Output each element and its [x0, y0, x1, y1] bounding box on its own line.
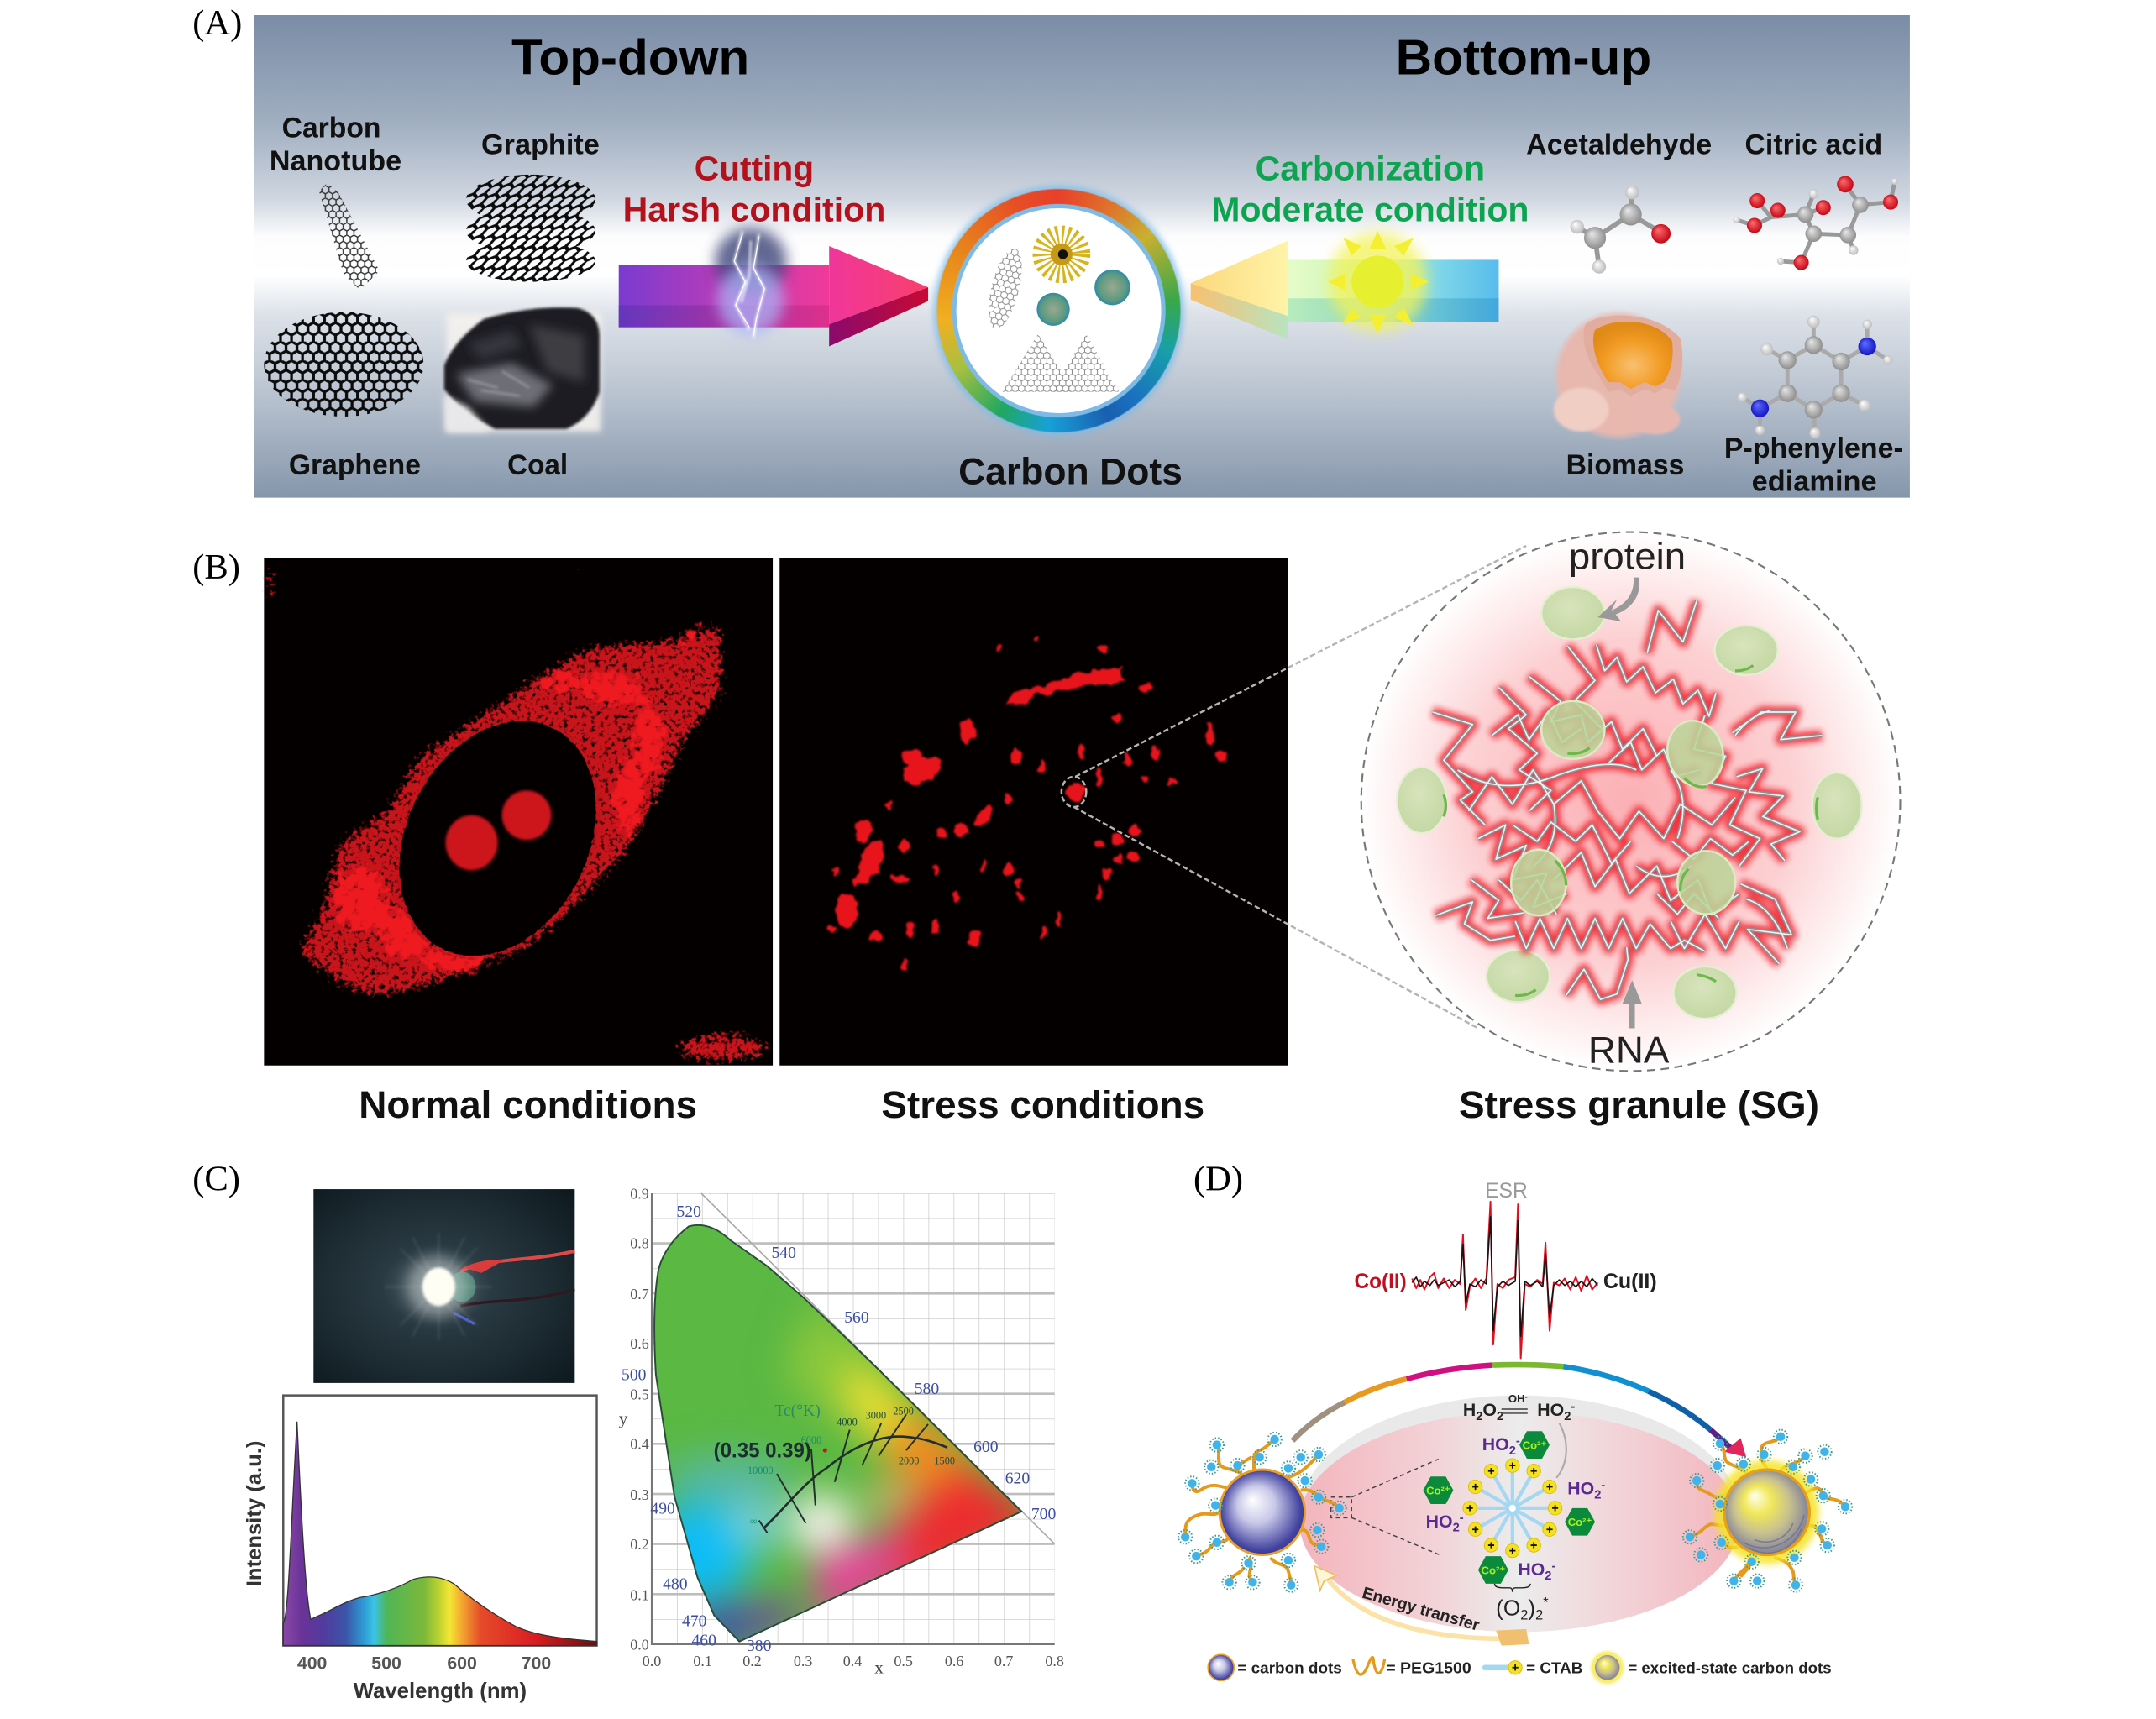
wavelength labels: 580	[915, 1380, 939, 1398]
label: (O2)2*: (O	[1496, 1596, 1520, 1621]
protein highlights	[1444, 665, 1818, 996]
label: Cu(II): Cu(II)	[1603, 1271, 1657, 1293]
label: protein: protein	[1569, 537, 1686, 578]
wavelength labels: 500	[622, 1366, 647, 1385]
label: (O2)2*: 2	[1520, 1607, 1528, 1622]
arrow: RNA	[1623, 980, 1642, 1029]
Co2+ hexagons: Co²⁺	[1482, 1564, 1505, 1576]
icon: carbon nanotube	[319, 183, 380, 290]
x axis ticks: 0.3	[794, 1653, 812, 1669]
wavelength labels: 600	[973, 1438, 999, 1456]
y axis ticks: 0.8	[630, 1234, 649, 1251]
reaction: H2O2 to HO2-: 2	[1476, 1410, 1482, 1423]
dashed zoom lines	[1331, 1459, 1440, 1555]
HO2- labels: 2	[1453, 1522, 1460, 1535]
label: Co(II): Co(II)	[1355, 1271, 1407, 1293]
axis names	[619, 1408, 884, 1677]
y axis ticks: 0.0	[630, 1636, 649, 1653]
colour temperature labels	[748, 1402, 955, 1528]
label: Graphite: Graphite	[481, 128, 600, 160]
y axis ticks: 0.2	[630, 1536, 649, 1553]
label: Carbon Nanotube: Carbon	[282, 113, 381, 144]
wavelength labels: 460	[691, 1632, 716, 1650]
Co2+ hexagons: Co²⁺	[1426, 1485, 1450, 1497]
y axis ticks: 0.9	[630, 1186, 649, 1203]
micrograph: normal conditions	[264, 558, 773, 1066]
x axis ticks: 0.8	[1045, 1653, 1064, 1669]
HO2- labels: -	[1551, 1560, 1555, 1574]
colour temperature labels: 10000	[748, 1465, 774, 1476]
rainbow arrow	[1293, 1365, 1746, 1457]
panel label D: (D)	[1193, 1160, 1243, 1199]
label: Carbonization Moderate condition: Carbonization	[1256, 149, 1485, 187]
axis names: x	[874, 1657, 884, 1677]
icon: graphene sheet	[264, 312, 423, 417]
x axis ticks: 0.1	[693, 1653, 712, 1669]
Co2+ hexagons: Co²⁺	[1523, 1439, 1546, 1451]
Planckian locus	[759, 1415, 947, 1533]
colour temperature labels: 2500	[893, 1406, 914, 1418]
label: Carbonization Moderate condition: Moderate condition	[1211, 191, 1529, 229]
reaction: H2O2 to HO2-	[1463, 1392, 1575, 1423]
wavelength labels: 700	[1031, 1505, 1056, 1523]
schematic: stress granule	[1361, 532, 1900, 1071]
panel label B: (B)	[192, 548, 240, 587]
legend: = excited-state carbon dots	[1628, 1659, 1832, 1676]
free proteins	[1397, 587, 1862, 1019]
HO2- labels: 2	[1509, 1444, 1516, 1458]
y axis ticks: 0.7	[630, 1286, 649, 1302]
wavelength labels: 520	[676, 1203, 701, 1221]
label: Cutting Harsh condition: Harsh condition	[623, 191, 885, 229]
label: Acetaldehyde: Acetaldehyde	[1526, 128, 1712, 160]
panel B: stress granule imaging	[264, 532, 1900, 1126]
label: P-phenylene-ediamine: ediamine	[1752, 465, 1877, 497]
label: Citric acid: Citric acid	[1744, 128, 1882, 160]
label: ESR: ESR	[1485, 1180, 1528, 1203]
axis names: y	[619, 1408, 628, 1428]
label: (O2)2*: *	[1543, 1596, 1549, 1611]
molecule: acetaldehyde	[1571, 186, 1671, 274]
label: Graphene: Graphene	[289, 449, 421, 481]
HO2- labels: 2	[1594, 1488, 1601, 1502]
red chromaticity point	[823, 1449, 827, 1453]
chart: ESR trace	[1412, 1202, 1597, 1358]
icon: biomass egg	[1552, 309, 1684, 442]
label: Coal: Coal	[507, 449, 568, 481]
HO2- labels: HO	[1567, 1479, 1594, 1499]
panel D: energy transfer mechanism	[1178, 1180, 1852, 1684]
label: Carbon Nanotube: Nanotube	[270, 145, 401, 177]
icon: graphite stacked sheets	[466, 175, 595, 282]
colour temperature labels: 6000	[801, 1434, 821, 1446]
carbon dots ring	[934, 186, 1184, 436]
x axis ticks: 0.4	[843, 1653, 862, 1669]
colour temperature labels: ∞	[750, 1516, 758, 1528]
wavelength labels: 620	[1005, 1469, 1030, 1487]
zoom callout lines	[1062, 546, 1526, 1029]
x axis tick labels	[297, 1653, 551, 1673]
chart: CIE chromaticity diagram	[619, 1186, 1064, 1677]
x axis ticks: 0.0	[643, 1653, 661, 1669]
y axis ticks: 0.1	[630, 1587, 649, 1604]
arrow: energy transfer	[1314, 1566, 1529, 1646]
x axis ticks: 0.6	[945, 1653, 963, 1669]
x axis tick labels: 700	[522, 1653, 551, 1673]
icon: graphene fragment	[982, 245, 1029, 332]
x axis ticks	[643, 1653, 1064, 1669]
arrow: HO2- to micelle	[1556, 1423, 1566, 1478]
panel A background	[254, 15, 1910, 498]
photo: glowing LED	[313, 1189, 574, 1383]
chart: emission spectrum	[244, 1396, 597, 1703]
colour temperature labels: 1500	[934, 1454, 955, 1466]
colour temperature labels: 2000	[899, 1454, 919, 1466]
caption: Stress conditions: Stress conditions	[881, 1083, 1204, 1126]
caption: Stress granule (SG): Stress granule (SG)	[1459, 1083, 1819, 1126]
x axis tick labels: 400	[297, 1653, 327, 1673]
icon: lightning	[715, 228, 786, 338]
legend	[1208, 1651, 1832, 1684]
icon: spiky polymer dot	[1044, 237, 1079, 272]
y axis ticks: 0.4	[630, 1435, 649, 1452]
gamut colour fill	[655, 1226, 1020, 1641]
wavelength labels: 490	[650, 1499, 675, 1517]
nucleoli	[445, 790, 551, 870]
label: P-phenylene-ediamine: P-phenylene-	[1724, 432, 1903, 464]
x axis tick labels: 500	[371, 1653, 401, 1673]
label: Biomass: Biomass	[1566, 449, 1684, 481]
x axis ticks: 0.5	[894, 1653, 913, 1669]
HO2- labels: HO	[1426, 1512, 1453, 1532]
x axis ticks: 0.7	[994, 1653, 1013, 1669]
x axis title: Wavelength (nm)	[354, 1678, 527, 1703]
caption: Normal conditions: Normal conditions	[359, 1083, 697, 1126]
molecule: citric acid	[1734, 176, 1898, 270]
heading: Bottom-up: Bottom-up	[1396, 30, 1651, 85]
x axis ticks: 0.2	[742, 1653, 762, 1669]
proteins in granule	[1511, 701, 1735, 915]
legend: = CTAB	[1526, 1659, 1582, 1676]
arrow: protein	[1597, 578, 1639, 621]
label: (O2)2*: )	[1528, 1596, 1535, 1621]
HO2- labels: HO	[1518, 1559, 1545, 1580]
y axis ticks: 0.3	[630, 1486, 649, 1503]
label: (O2)2*: 2	[1535, 1607, 1543, 1622]
HO2- labels: 2	[1545, 1570, 1551, 1583]
HO2- labels: -	[1601, 1479, 1605, 1492]
micrograph: stress conditions	[779, 558, 1288, 1066]
HO2- labels: -	[1460, 1512, 1464, 1525]
molecule: p-phenylenediamine	[1737, 316, 1892, 438]
reaction: H2O2 to HO2-: -	[1571, 1401, 1575, 1414]
brace	[1495, 1584, 1530, 1592]
icon: teal dots	[1036, 293, 1070, 326]
reaction: H2O2 to HO2-: 2	[1497, 1410, 1503, 1423]
colour temperature labels: Tc(°K)	[774, 1402, 821, 1420]
spectrum curve	[283, 1422, 597, 1646]
icon: sun	[1328, 231, 1429, 334]
wavelength labels: 380	[747, 1637, 772, 1655]
CTAB micelle	[1463, 1459, 1562, 1558]
HO2- labels: HO	[1482, 1434, 1509, 1454]
label: RNA: RNA	[1588, 1030, 1670, 1071]
chromaticity label: (0.35 0.39)	[714, 1439, 811, 1462]
panel label A: (A)	[192, 3, 242, 43]
y axis title: Intensity (a.u.)	[244, 1441, 266, 1586]
wavelength labels: 470	[682, 1612, 707, 1631]
y axis ticks: 0.6	[630, 1335, 649, 1352]
y axis ticks: 0.5	[630, 1386, 649, 1403]
label: Energy transfer: Energy transfer	[1360, 1584, 1482, 1635]
reaction: H2O2 to HO2-: -	[1525, 1393, 1528, 1402]
legend: = PEG1500	[1386, 1659, 1471, 1676]
label: Cutting Harsh condition: Cutting	[695, 149, 814, 187]
carbon dot with PEG chains, left	[1178, 1433, 1346, 1592]
reaction: H2O2 to HO2-: OH	[1508, 1392, 1525, 1405]
pink reaction ellipse	[1299, 1396, 1739, 1632]
arrow: top-down	[619, 246, 928, 347]
wavelength labels: 480	[663, 1575, 688, 1593]
excited carbon dot with PEG chains, right	[1683, 1430, 1852, 1592]
icon: coal	[444, 307, 601, 432]
colour temperature labels: 3000	[866, 1409, 886, 1421]
colour temperature labels: 4000	[837, 1417, 858, 1428]
legend: = carbon dots	[1237, 1659, 1342, 1676]
HO2- labels	[1426, 1434, 1605, 1583]
reaction: H2O2 to HO2-: O	[1482, 1400, 1497, 1420]
panel A: carbon dot synthesis	[254, 15, 1910, 498]
reaction: H2O2 to HO2-: H	[1463, 1400, 1476, 1420]
wavelength labels: 540	[771, 1244, 796, 1262]
icon: triangular carbon flakes	[1002, 334, 1120, 392]
reaction: H2O2 to HO2-: 2	[1564, 1410, 1571, 1423]
label: Carbon Dots: Carbon Dots	[958, 451, 1183, 492]
x axis tick labels: 600	[447, 1653, 477, 1673]
Co2+ hexagons	[1423, 1431, 1595, 1584]
panel label C: (C)	[192, 1160, 240, 1199]
reaction: H2O2 to HO2-: HO	[1537, 1400, 1564, 1420]
heading: Top-down: Top-down	[511, 30, 749, 85]
wavelength labels	[622, 1203, 1056, 1655]
RNA network	[1433, 600, 1822, 999]
HO2- labels: -	[1516, 1435, 1520, 1449]
arrow: bottom-up	[1191, 240, 1498, 339]
y axis ticks	[630, 1186, 649, 1653]
Co2+ hexagons: Co²⁺	[1568, 1516, 1592, 1528]
wavelength labels: 560	[844, 1308, 869, 1327]
panel C: white LED	[244, 1186, 1064, 1703]
